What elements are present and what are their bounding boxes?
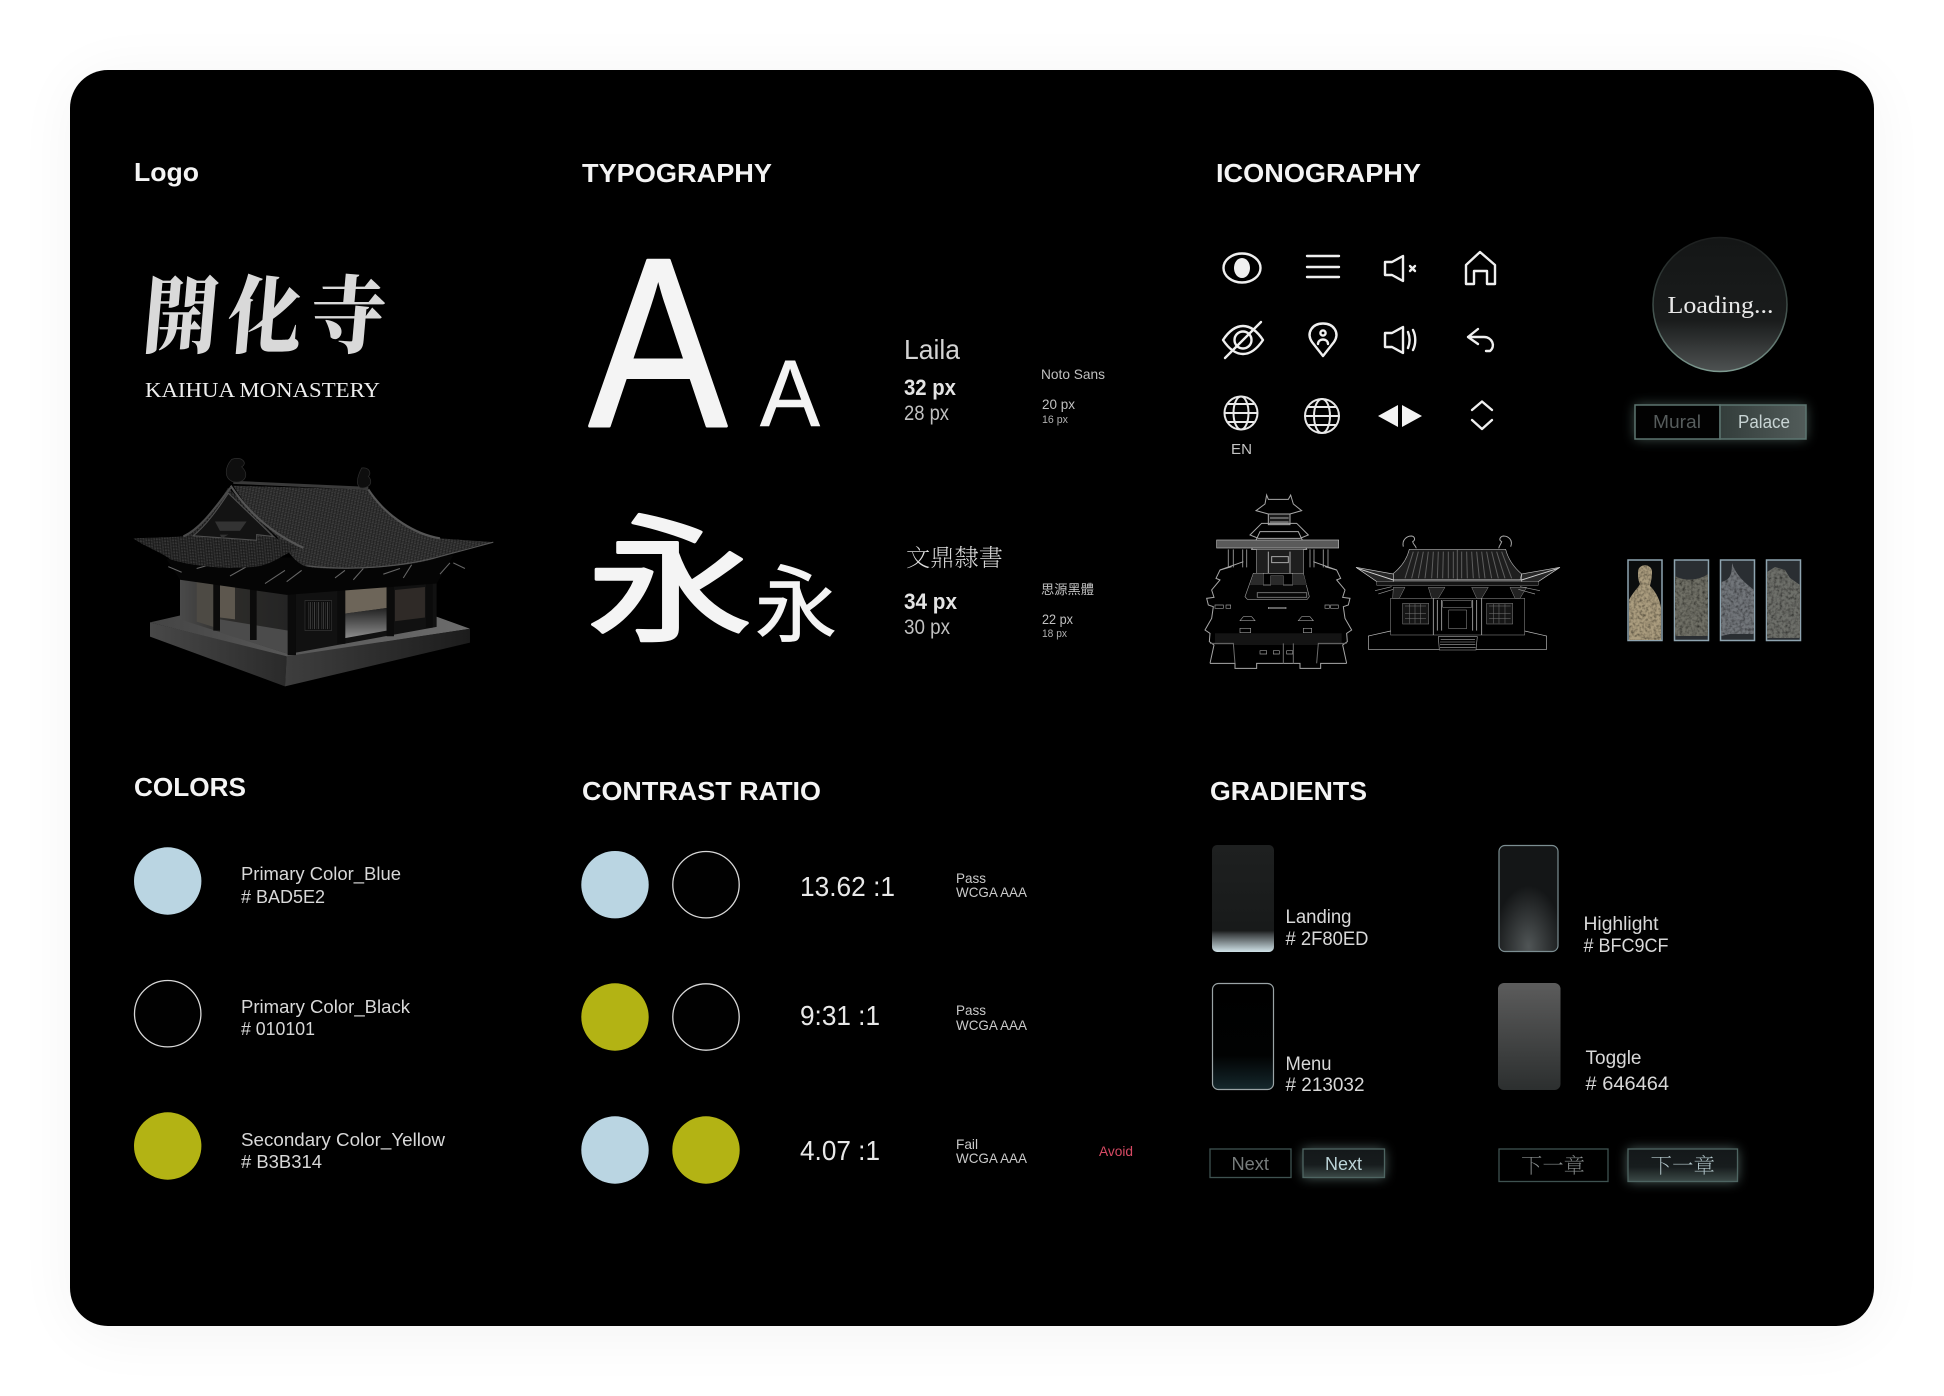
thumbnail 1	[1628, 560, 1662, 640]
icon: globe EN	[1224, 396, 1258, 458]
button: chinese next default: 下一章	[1521, 1150, 1585, 1180]
tower line drawing	[1205, 495, 1352, 668]
heading: COLORS: COLORS	[134, 772, 246, 802]
temple line drawing	[1356, 536, 1560, 650]
icon: eye	[1224, 254, 1260, 282]
label: toggle: # 646464	[1586, 1074, 1669, 1095]
label: highlight	[1584, 914, 1668, 957]
icon: globe	[1305, 399, 1339, 433]
Laila font spec: Laila	[904, 334, 960, 365]
thumbnail 3	[1720, 560, 1754, 640]
row: yellow on black: Pass	[956, 1002, 986, 1018]
label: landing: Landing	[1286, 907, 1352, 928]
button: next default	[1210, 1149, 1291, 1178]
文鼎隸書 font spec	[904, 538, 1003, 639]
label: primary black	[241, 997, 411, 1039]
label: primary black: # 010101	[241, 1019, 315, 1039]
Laila font spec: 28 px	[904, 402, 949, 425]
icon: back arrow	[1468, 329, 1493, 351]
思源黑體 font spec: 思源黑體	[1041, 579, 1094, 598]
button: next default: Next	[1232, 1154, 1269, 1174]
mural palace toggle: Mural	[1653, 412, 1701, 432]
label: secondary yellow: # B3B314	[241, 1152, 322, 1172]
button: next hover: Next	[1325, 1154, 1362, 1174]
panel: typography	[582, 158, 1105, 670]
logo wordmark: KAIHUA MONASTERY	[145, 378, 380, 402]
heading: Logo: Logo	[134, 157, 199, 187]
icon: speaker on	[1385, 327, 1415, 353]
Noto Sans font spec: 16 px	[1042, 414, 1068, 426]
思源黑體 font spec: 22 px	[1042, 611, 1073, 627]
label: EN: EN	[1231, 441, 1252, 458]
icon: eye slashed	[1223, 322, 1263, 358]
label: primary blue: # BAD5E2	[241, 887, 325, 907]
avoid warning: Avoid	[1099, 1143, 1133, 1159]
large chinese specimen: 永	[587, 470, 753, 670]
swatch: highlight gradient	[1499, 846, 1558, 952]
row: blue on yellow: WCGA AAA	[956, 1150, 1028, 1166]
row: yellow on black: WCGA AAA	[956, 1017, 1028, 1033]
panel: colors	[134, 772, 446, 1180]
icon: speaker muted	[1385, 256, 1415, 281]
swatch: primary black	[134, 980, 201, 1047]
label: secondary yellow: Secondary Color_Yellow	[241, 1130, 446, 1151]
small latin specimen A: A	[760, 341, 821, 447]
Noto Sans font spec: 20 px	[1042, 396, 1075, 412]
label: menu	[1286, 1054, 1364, 1096]
button: chinese next hover	[1628, 1149, 1738, 1182]
row: blue on black: 13.62 :1	[800, 871, 895, 902]
label: primary blue	[241, 864, 401, 907]
label: primary blue: Primary Color_Blue	[241, 864, 401, 885]
label: primary black: Primary Color_Black	[241, 997, 411, 1018]
row: blue on yellow: Fail	[956, 1136, 978, 1152]
mural palace toggle	[1635, 405, 1806, 439]
row: blue on yellow: 4.07 :1	[800, 1135, 880, 1166]
label: highlight: Highlight	[1584, 914, 1659, 935]
icon: left right arrows	[1378, 405, 1422, 427]
swatch: toggle gradient	[1498, 983, 1560, 1090]
mural thumbnails	[1628, 560, 1800, 640]
swatch: primary blue	[134, 847, 201, 915]
swatch: menu gradient	[1212, 984, 1274, 1090]
thumbnail 2	[1674, 560, 1708, 640]
loading button: Loading...	[1668, 293, 1774, 319]
panel: gradients	[1210, 776, 1738, 1182]
Laila font spec	[904, 334, 960, 425]
文鼎隸書 font spec: 34 px	[904, 589, 958, 614]
heading: CONTRAST RATIO: CONTRAST RATIO	[582, 776, 821, 806]
heading: ICONOGRAPHY: ICONOGRAPHY	[1216, 158, 1421, 188]
label: menu: # 213032	[1286, 1075, 1364, 1096]
icon: menu	[1307, 256, 1339, 277]
panel: contrast ratio	[581, 776, 1133, 1184]
label: toggle: Toggle	[1586, 1048, 1642, 1069]
思源黑體 font spec	[1041, 579, 1094, 640]
logo calligraphy: 開化寺	[139, 249, 392, 371]
button: chinese next hover: 下一章	[1650, 1150, 1715, 1180]
label: secondary yellow	[241, 1130, 446, 1172]
文鼎隸書 font spec: 30 px	[904, 616, 950, 639]
label: landing: # 2F80ED	[1286, 929, 1368, 950]
button: next hover	[1303, 1149, 1384, 1178]
row: yellow on black	[581, 983, 1028, 1051]
swatch: landing gradient	[1212, 845, 1274, 952]
row: blue on yellow	[581, 1116, 1133, 1184]
row: blue on black: WCGA AAA	[956, 884, 1028, 900]
swatch: secondary yellow	[134, 1112, 201, 1180]
loading button	[1653, 238, 1787, 372]
Laila font spec: 32 px	[904, 375, 957, 400]
mural palace toggle: Palace	[1738, 412, 1790, 432]
label: landing	[1286, 907, 1368, 950]
icon: up down chevrons	[1472, 402, 1492, 429]
row: yellow on black: 9:31 :1	[800, 1000, 880, 1031]
label: highlight: # BFC9CF	[1584, 936, 1668, 957]
row: blue on black: Pass	[956, 870, 986, 886]
Noto Sans font spec: Noto Sans	[1041, 366, 1105, 382]
button: chinese next default	[1499, 1149, 1608, 1182]
Noto Sans font spec	[1041, 366, 1105, 426]
label: menu: Menu	[1286, 1054, 1332, 1075]
文鼎隸書 font spec: 文鼎隸書	[906, 538, 1003, 573]
icon: location pin	[1310, 324, 1336, 356]
small chinese specimen: 永	[755, 538, 837, 659]
思源黑體 font spec: 18 px	[1042, 628, 1067, 640]
icon: home	[1466, 252, 1495, 284]
heading: GRADIENTS: GRADIENTS	[1210, 776, 1367, 806]
temple 3D render	[133, 458, 493, 686]
label: toggle	[1586, 1048, 1669, 1095]
row: blue on black	[581, 851, 1028, 918]
thumbnail 4	[1766, 560, 1800, 640]
heading: TYPOGRAPHY: TYPOGRAPHY	[582, 158, 772, 188]
large latin specimen A: A	[589, 209, 727, 478]
panel: iconography	[1205, 158, 1806, 668]
panel: logo	[133, 157, 493, 686]
